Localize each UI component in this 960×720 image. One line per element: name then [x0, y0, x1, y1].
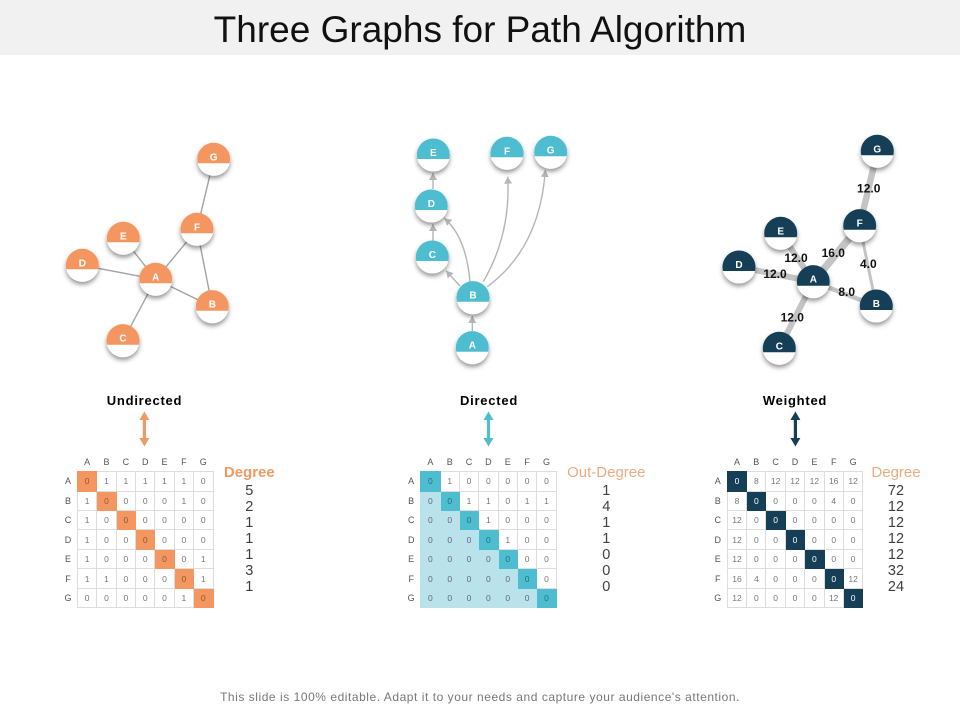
degree list: weighted: 12 [888, 499, 904, 515]
matrix: undirected: 0 [162, 535, 167, 545]
matrix: undirected: 0 [123, 496, 128, 506]
node G: G [873, 144, 881, 155]
matrix: directed: 0 [525, 554, 529, 564]
node G: G [547, 145, 555, 156]
matrix: weighted: 0 [754, 515, 759, 525]
matrix: undirected: G [64, 593, 72, 603]
matrix: directed: 0 [447, 574, 452, 584]
matrix: weighted: 0 [773, 554, 778, 564]
matrix: undirected: 0 [162, 496, 167, 506]
matrix: weighted: B [753, 457, 759, 467]
out-degree list: directed: 0 [602, 563, 610, 579]
node A: A [469, 341, 476, 352]
matrix: weighted: 0 [773, 535, 778, 545]
node F [490, 137, 524, 170]
matrix: weighted: 0 [851, 535, 855, 545]
degree list: undirected: Degree [224, 464, 275, 481]
matrix: weighted: 12 [790, 476, 800, 486]
matrix: undirected: 0 [123, 535, 128, 545]
matrix: weighted: A [715, 476, 721, 486]
matrix: weighted: 0 [773, 496, 778, 506]
matrix: directed: 0 [467, 554, 471, 564]
matrix: weighted: 0 [773, 593, 778, 603]
matrix: undirected: A [84, 457, 90, 467]
matrix: directed: 0 [467, 476, 471, 486]
out-degree list: directed: 4 [602, 499, 610, 515]
node B [456, 281, 490, 314]
undirected graph [66, 143, 230, 357]
matrix: directed: 0 [467, 535, 471, 545]
matrix: undirected: D [142, 457, 148, 467]
matrix: weighted: 0 [793, 574, 797, 584]
matrix: undirected: 0 [143, 515, 148, 525]
matrix: undirected: 0 [182, 554, 186, 564]
edge weights: 16.0 [822, 246, 845, 260]
edge weights: 12.0 [781, 310, 804, 324]
matrix: directed: 0 [428, 476, 433, 486]
matrix: undirected: 1 [182, 476, 186, 486]
matrix: directed: 0 [525, 574, 529, 584]
matrix: undirected: 1 [104, 476, 109, 486]
matrix: directed: 0 [447, 554, 452, 564]
node D: D [735, 260, 743, 271]
matrix: undirected: C [123, 457, 129, 467]
matrix: directed: 0 [486, 593, 491, 603]
degree list: weighted: 72 [888, 483, 904, 499]
edge weights [763, 182, 881, 324]
matrix: undirected: 1 [162, 476, 167, 486]
matrix: directed [408, 457, 557, 608]
matrix: directed: C [408, 515, 414, 525]
degree list: undirected: 2 [245, 499, 253, 515]
matrix: directed: 0 [428, 574, 433, 584]
matrix: weighted: 0 [812, 535, 817, 545]
matrix: undirected [64, 457, 214, 608]
matrix: directed: 0 [505, 554, 510, 564]
undirected edges [82, 159, 214, 341]
directed edges [433, 170, 545, 331]
matrix: weighted: 12 [771, 476, 780, 486]
node C [106, 324, 140, 357]
matrix: weighted: 12 [829, 593, 838, 603]
matrix: weighted: 0 [812, 496, 817, 506]
matrix: undirected: 1 [201, 574, 206, 584]
node F [180, 213, 214, 246]
node D [415, 189, 448, 222]
matrix: weighted: 12 [732, 515, 742, 525]
matrix: undirected: 0 [85, 593, 90, 603]
matrix: undirected: E [65, 554, 71, 564]
matrix: weighted: 0 [851, 496, 855, 506]
matrix: directed: 1 [486, 515, 491, 525]
matrix: directed: 0 [447, 515, 452, 525]
matrix: weighted: C [772, 457, 779, 467]
matrix: directed: 0 [428, 535, 433, 545]
matrix: weighted: 0 [793, 496, 797, 506]
matrix: undirected: 0 [143, 554, 148, 564]
matrix: weighted: 12 [848, 574, 858, 584]
matrix: undirected: 0 [143, 496, 148, 506]
matrix: weighted: G [850, 457, 857, 467]
matrix: directed: 1 [525, 496, 529, 506]
matrix: undirected: A [65, 476, 71, 486]
matrix: undirected: 1 [182, 593, 186, 603]
matrix: directed: E [505, 457, 511, 467]
matrix: undirected: 0 [143, 593, 148, 603]
degree list: undirected [224, 464, 275, 595]
node A [456, 331, 489, 364]
label: directed: Directed [460, 392, 518, 408]
matrix: weighted: E [715, 554, 721, 564]
matrix: undirected: C [65, 515, 71, 525]
node B [860, 289, 893, 322]
node G [197, 143, 230, 176]
matrix: weighted: 0 [831, 574, 836, 584]
label: weighted: Weighted [763, 392, 827, 408]
matrix: undirected: 0 [123, 515, 128, 525]
matrix: weighted: 0 [793, 515, 797, 525]
matrix: directed: F [408, 574, 414, 584]
matrix: weighted: 0 [735, 476, 739, 486]
footer note: This slide is 100% editable. Adapt it to your needs and capture your audience's attention. [220, 690, 740, 704]
matrix: weighted: 0 [793, 593, 797, 603]
matrix: weighted: 16 [732, 574, 742, 584]
node D: D [428, 199, 435, 210]
node F: F [504, 146, 510, 157]
weighted edges [739, 151, 877, 348]
matrix: directed: 0 [467, 574, 471, 584]
matrix: directed: 0 [486, 574, 491, 584]
node E: E [777, 226, 784, 237]
matrix: directed: 1 [447, 476, 452, 486]
matrix: weighted: D [792, 457, 798, 467]
matrix: undirected: 1 [85, 515, 90, 525]
matrix: directed: A [427, 457, 433, 467]
matrix: weighted: 0 [754, 554, 759, 564]
matrix: directed: 0 [428, 496, 433, 506]
matrix: undirected: 0 [201, 496, 206, 506]
matrix: directed: 0 [447, 535, 452, 545]
matrix: undirected: 0 [143, 574, 148, 584]
matrix: weighted: D [715, 535, 721, 545]
matrix: undirected: 0 [123, 554, 128, 564]
matrix: weighted: 0 [773, 515, 778, 525]
matrix: weighted: 0 [812, 574, 817, 584]
arrow: weighted [790, 412, 800, 446]
matrix: directed: 1 [505, 535, 510, 545]
node C: C [119, 334, 127, 345]
matrix: weighted: 0 [831, 554, 836, 564]
matrix: undirected: 0 [201, 515, 206, 525]
matrix: undirected: 0 [182, 535, 186, 545]
matrix: directed: G [543, 457, 550, 467]
matrix: weighted: E [811, 457, 817, 467]
matrix: directed: F [524, 457, 530, 467]
matrix: undirected: 0 [162, 593, 167, 603]
matrix: weighted: 0 [851, 515, 855, 525]
matrix: directed: 0 [486, 535, 491, 545]
node G [534, 136, 567, 169]
matrix: directed: 0 [525, 535, 529, 545]
matrix: directed: E [408, 554, 414, 564]
out-degree list: directed: 1 [602, 483, 610, 499]
matrix: undirected: 0 [201, 593, 206, 603]
matrix: undirected: 0 [123, 593, 128, 603]
matrix: weighted: G [714, 593, 721, 603]
matrix: directed: 0 [505, 515, 510, 525]
matrix: directed: 0 [525, 593, 529, 603]
matrix: undirected: 0 [104, 515, 109, 525]
matrix: undirected: 0 [162, 574, 167, 584]
node E: E [430, 148, 437, 159]
matrix: weighted: F [831, 457, 836, 467]
matrix: directed: D [485, 457, 492, 467]
matrix: weighted: C [715, 515, 721, 525]
matrix: weighted: 12 [732, 593, 742, 603]
matrix: weighted: 0 [831, 515, 836, 525]
matrix: directed: 0 [505, 496, 510, 506]
degree list: weighted [871, 464, 921, 595]
matrix: undirected: G [200, 457, 207, 467]
matrix: undirected: 1 [182, 496, 186, 506]
matrix: weighted: 0 [812, 593, 817, 603]
degree list: undirected: 5 [245, 483, 253, 499]
matrix: undirected: 1 [85, 554, 90, 564]
node B: B [469, 291, 477, 302]
matrix: directed: 0 [486, 476, 491, 486]
matrix: undirected: B [104, 457, 110, 467]
matrix: weighted: 12 [810, 476, 819, 486]
matrix: weighted: 0 [793, 554, 797, 564]
matrix: weighted: 0 [773, 574, 778, 584]
matrix: directed: 0 [467, 515, 471, 525]
matrix: undirected: 1 [85, 535, 90, 545]
out-degree list: directed: Out-Degree [567, 464, 645, 481]
matrix: directed: 0 [486, 554, 491, 564]
matrix: directed: 0 [544, 535, 549, 545]
matrix: undirected: 0 [85, 476, 90, 486]
matrix: undirected: 0 [201, 476, 206, 486]
matrix: directed: 0 [467, 593, 471, 603]
weighted graph [722, 135, 894, 365]
node A [139, 263, 172, 296]
degree list: weighted: 12 [888, 547, 904, 563]
matrix: directed: 0 [544, 476, 549, 486]
degree list: undirected: 1 [245, 547, 253, 563]
matrix: directed: 0 [428, 593, 433, 603]
out-degree list: directed: 0 [602, 547, 610, 563]
arrow: undirected [139, 412, 149, 446]
matrix: undirected: 1 [85, 496, 90, 506]
degree list: weighted: 12 [888, 515, 904, 531]
node G [861, 135, 894, 168]
directed graph [415, 136, 567, 364]
title band [0, 0, 960, 55]
node A [797, 265, 830, 298]
matrix: weighted: A [734, 457, 740, 467]
node D: D [79, 258, 86, 269]
matrix: undirected: 0 [104, 593, 109, 603]
matrix: undirected: 0 [182, 574, 186, 584]
matrix: directed: 0 [525, 476, 529, 486]
out-degree list: directed: 0 [602, 579, 610, 595]
matrix: undirected: 1 [123, 476, 128, 486]
out-degree list: directed [567, 464, 645, 595]
degree list: weighted: 32 [888, 563, 904, 579]
edge weights: 12.0 [763, 267, 787, 281]
node E: E [120, 231, 127, 242]
matrix: undirected: D [65, 535, 71, 545]
degree list: weighted: 12 [888, 531, 904, 547]
matrix: directed: B [408, 496, 414, 506]
matrix: weighted: 0 [793, 535, 797, 545]
matrix: undirected: F [65, 574, 71, 584]
matrix: directed: 1 [467, 496, 471, 506]
node B [196, 290, 229, 323]
node E [417, 138, 450, 172]
node A: A [810, 275, 817, 286]
matrix: undirected: 0 [104, 554, 109, 564]
matrix: undirected: F [181, 457, 187, 467]
matrix: undirected: 0 [182, 515, 186, 525]
node D [722, 250, 756, 284]
node C: C [776, 341, 783, 352]
matrix: weighted: 8 [754, 476, 759, 486]
matrix: directed: 1 [486, 496, 491, 506]
matrix: directed: 0 [525, 515, 529, 525]
matrix: undirected: 0 [123, 574, 128, 584]
matrix: undirected: 1 [85, 574, 90, 584]
degree list: undirected: 1 [245, 531, 253, 547]
out-degree list: directed: 1 [602, 531, 610, 547]
degree list: undirected: 3 [245, 563, 253, 579]
node E [764, 217, 797, 250]
matrix: undirected: 1 [104, 574, 109, 584]
matrix: directed: 1 [544, 496, 549, 506]
matrix: directed: 0 [428, 515, 433, 525]
matrix: undirected: 1 [143, 476, 148, 486]
label: undirected: Undirected [107, 392, 182, 408]
node F [843, 209, 876, 242]
matrix: weighted: 12 [732, 554, 742, 564]
node D [66, 249, 99, 282]
edge weights: 12.0 [784, 251, 808, 265]
matrix: undirected: 0 [162, 554, 167, 564]
matrix: directed: 0 [544, 515, 549, 525]
matrix: weighted: 0 [851, 554, 855, 564]
degree list: undirected: 1 [245, 579, 253, 595]
node B: B [209, 300, 216, 311]
matrix: directed: C [466, 457, 472, 467]
matrix: weighted: 0 [812, 554, 817, 564]
node G: G [210, 152, 218, 163]
matrix: weighted: 12 [732, 535, 742, 545]
matrix: directed: 0 [544, 593, 549, 603]
node A: A [152, 272, 159, 283]
matrix: undirected: 0 [143, 535, 148, 545]
matrix: directed: 0 [544, 554, 549, 564]
matrix: weighted: 0 [754, 535, 759, 545]
matrix: weighted: 16 [829, 476, 838, 486]
degree list: undirected: 1 [245, 515, 253, 531]
matrix: directed: 0 [544, 574, 549, 584]
matrix: undirected: 0 [104, 535, 109, 545]
node C [416, 240, 449, 274]
matrix: weighted: 12 [848, 476, 858, 486]
matrix: weighted: 4 [754, 574, 759, 584]
matrix: weighted: 0 [831, 535, 836, 545]
matrix: weighted [714, 457, 863, 608]
matrix: directed: 0 [505, 574, 510, 584]
matrix: undirected: 0 [104, 496, 109, 506]
matrix: weighted: F [715, 574, 721, 584]
edge weights: 12.0 [857, 182, 881, 196]
edge weights: 4.0 [860, 257, 877, 271]
matrix: weighted: 8 [735, 496, 739, 506]
node B: B [873, 299, 880, 310]
out-degree list: directed: 1 [602, 515, 610, 531]
matrix: weighted: 4 [831, 496, 836, 506]
matrix: weighted: 0 [851, 593, 855, 603]
matrix: weighted: 0 [812, 515, 817, 525]
matrix: undirected: 0 [201, 535, 206, 545]
degree list: weighted: 24 [888, 579, 904, 595]
matrix: directed: 0 [505, 476, 510, 486]
matrix: directed: D [408, 535, 414, 545]
node C: C [429, 250, 436, 261]
matrix: undirected: 0 [162, 515, 167, 525]
matrix: undirected: E [162, 457, 168, 467]
node F: F [857, 219, 863, 230]
node F: F [194, 222, 200, 233]
matrix: undirected: B [65, 496, 71, 506]
matrix: weighted: B [715, 496, 721, 506]
node C [763, 332, 796, 365]
matrix: weighted: 0 [754, 496, 759, 506]
edge weights: 8.0 [838, 285, 855, 299]
matrix: weighted: 0 [754, 593, 759, 603]
node E [107, 222, 140, 255]
matrix: directed: B [447, 457, 453, 467]
matrix: directed: 0 [447, 496, 452, 506]
matrix: directed: A [408, 476, 414, 486]
degree list: weighted: Degree [871, 464, 921, 481]
matrix: undirected: 1 [201, 554, 206, 564]
matrix: directed: G [408, 593, 415, 603]
title: Three Graphs for Path Algorithm [214, 9, 746, 50]
arrow: directed [484, 412, 494, 446]
matrix: directed: 0 [428, 554, 433, 564]
matrix: directed: 0 [505, 593, 510, 603]
matrix: directed: 0 [447, 593, 452, 603]
